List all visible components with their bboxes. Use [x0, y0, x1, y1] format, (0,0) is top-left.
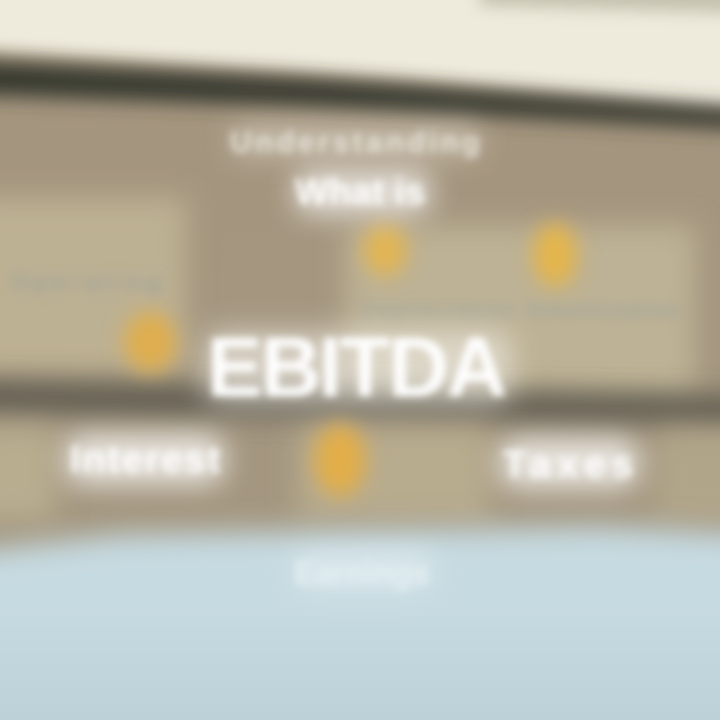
panel: right sign	[345, 226, 695, 398]
glow: white label	[296, 170, 430, 214]
floor	[0, 526, 720, 720]
text block: right panel: Depreciation Amortization	[360, 297, 680, 324]
panel: lower left	[0, 428, 56, 520]
glow: EBITDA	[204, 330, 512, 404]
dark ceiling shadow	[0, 60, 720, 130]
ceiling band	[0, 0, 720, 112]
icon: coin upper centre	[363, 224, 407, 276]
glow: lower left	[66, 434, 224, 484]
heading: EBITDA: EBITDA	[207, 320, 507, 414]
icon: coin upper right	[533, 223, 577, 287]
panel: lower right	[654, 432, 720, 522]
heading: top title: Understanding	[230, 126, 480, 159]
dark lower ledge	[0, 382, 720, 424]
panel: left sign	[0, 198, 186, 376]
icon: coin left	[124, 312, 176, 372]
glow: lower right	[500, 438, 638, 488]
heading: white label: What is	[295, 171, 425, 212]
icon: coin lower centre	[314, 424, 366, 496]
label: lower right: Taxes	[503, 444, 633, 486]
glow: floor caption	[295, 552, 433, 588]
panel: lower centre	[298, 428, 490, 520]
label: floor caption: Earnings	[294, 555, 430, 591]
text block: left panel: Operating	[10, 269, 160, 296]
label: lower left: Interest	[70, 439, 220, 481]
glow: title	[232, 126, 480, 154]
